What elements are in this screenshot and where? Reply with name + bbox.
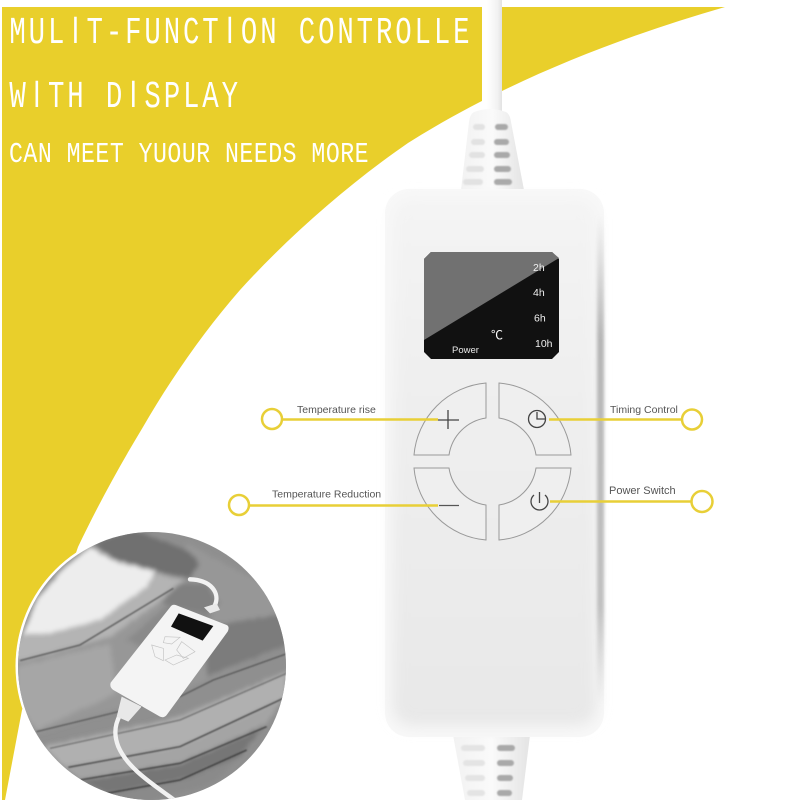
callout: temperature reduction [229, 488, 438, 515]
callout: temperature reduction: Temperature Reduction [272, 488, 381, 500]
mini controller strain reliefs [117, 603, 220, 722]
photo: blanket with controller [13, 530, 290, 800]
heading line 2: WITH DISPLAY [9, 74, 238, 118]
button: temperature rise [414, 383, 486, 455]
button: temperature reduction [414, 468, 486, 540]
subheading: CAN MEET YUOUR NEEDS MORE [9, 138, 369, 171]
callout: temperature rise: Temperature rise [297, 404, 376, 416]
button: timing [499, 383, 571, 455]
mini controller buttons [152, 637, 195, 665]
mini controller screen [171, 613, 213, 641]
icon: power [531, 492, 548, 510]
bottom strain relief [453, 735, 530, 800]
title text [9, 10, 470, 171]
timer labels: 2h [533, 262, 545, 274]
mini controller cable [115, 579, 216, 800]
power label: Power [452, 345, 479, 356]
white ring around photo [16, 530, 288, 800]
callout: timing control [549, 404, 702, 430]
timer labels: 6h [534, 312, 546, 324]
timer labels: 10h [535, 338, 553, 350]
blanket folds [13, 530, 287, 800]
button ring [414, 383, 571, 540]
mini controller body [110, 605, 229, 717]
callout: power switch: Power Switch [609, 485, 676, 497]
icon: plus [438, 410, 459, 429]
display screen [424, 252, 559, 359]
top strain relief [461, 109, 524, 190]
icon: minus [439, 504, 459, 506]
celsius symbol: ℃ [491, 328, 503, 342]
callout: power switch [550, 485, 712, 512]
icon: clock [528, 410, 546, 428]
top cable [482, 0, 502, 116]
timer labels: 4h [533, 287, 545, 299]
button: power [499, 468, 571, 540]
controller body [385, 189, 604, 737]
timer labels [533, 262, 553, 350]
fold shadow lines [20, 588, 287, 793]
callout: temperature rise [262, 404, 438, 429]
heading line 1: MULIT-FUNCTION CONTROLLE [9, 10, 470, 54]
callout: timing control: Timing Control [610, 404, 678, 416]
